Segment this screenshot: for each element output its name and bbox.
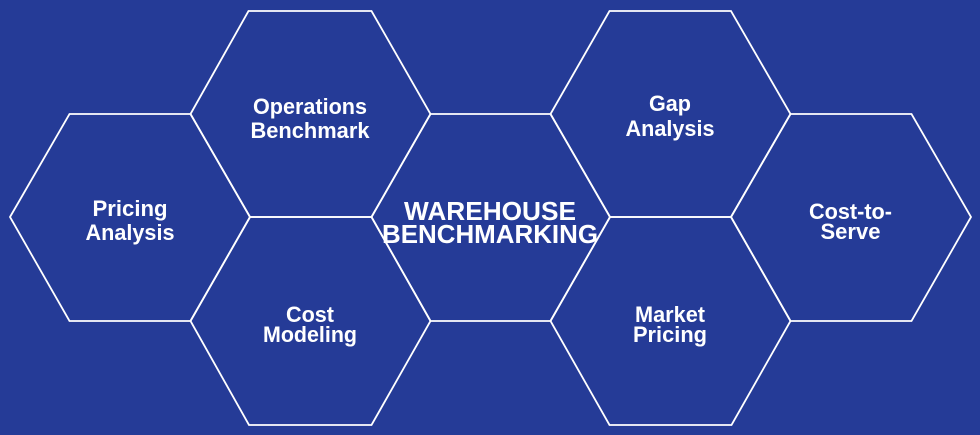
hexagon: Gap Analysis: Analysis xyxy=(626,116,714,141)
hexagon: Cost Modeling: Modeling xyxy=(263,322,357,347)
hexagon: Operations Benchmark xyxy=(190,11,430,217)
hexagon: Warehouse Benchmarking (center): BENCHMARKING xyxy=(382,221,598,249)
hexagon: Gap Analysis: Gap xyxy=(649,91,691,116)
hexagon: Market Pricing: Pricing xyxy=(633,322,707,347)
hexagon: Warehouse Benchmarking (center) xyxy=(372,114,610,321)
hexagon: Market Pricing xyxy=(550,217,790,425)
hexagon: Pricing Analysis xyxy=(10,114,250,321)
hexagon: Warehouse Benchmarking (center): WAREHOUSE xyxy=(404,198,576,226)
hexagon: Gap Analysis xyxy=(550,11,790,217)
hexagon: Operations Benchmark: Operations xyxy=(253,94,367,119)
hexagon: Cost Modeling: Cost xyxy=(286,302,335,327)
hexagon: Pricing Analysis: Analysis xyxy=(86,220,174,245)
hexagon: Operations Benchmark: Benchmark xyxy=(250,118,370,143)
hexagon: Pricing Analysis: Pricing xyxy=(92,196,168,221)
hexagon: Cost Modeling xyxy=(190,217,430,425)
hexagon: Cost-to-Serve: Cost-to- xyxy=(809,199,892,224)
hexagon: Cost-to-Serve: Serve xyxy=(820,219,880,244)
hexagon: Cost-to-Serve xyxy=(731,114,971,321)
hexagon: Market Pricing: Market xyxy=(635,302,706,327)
